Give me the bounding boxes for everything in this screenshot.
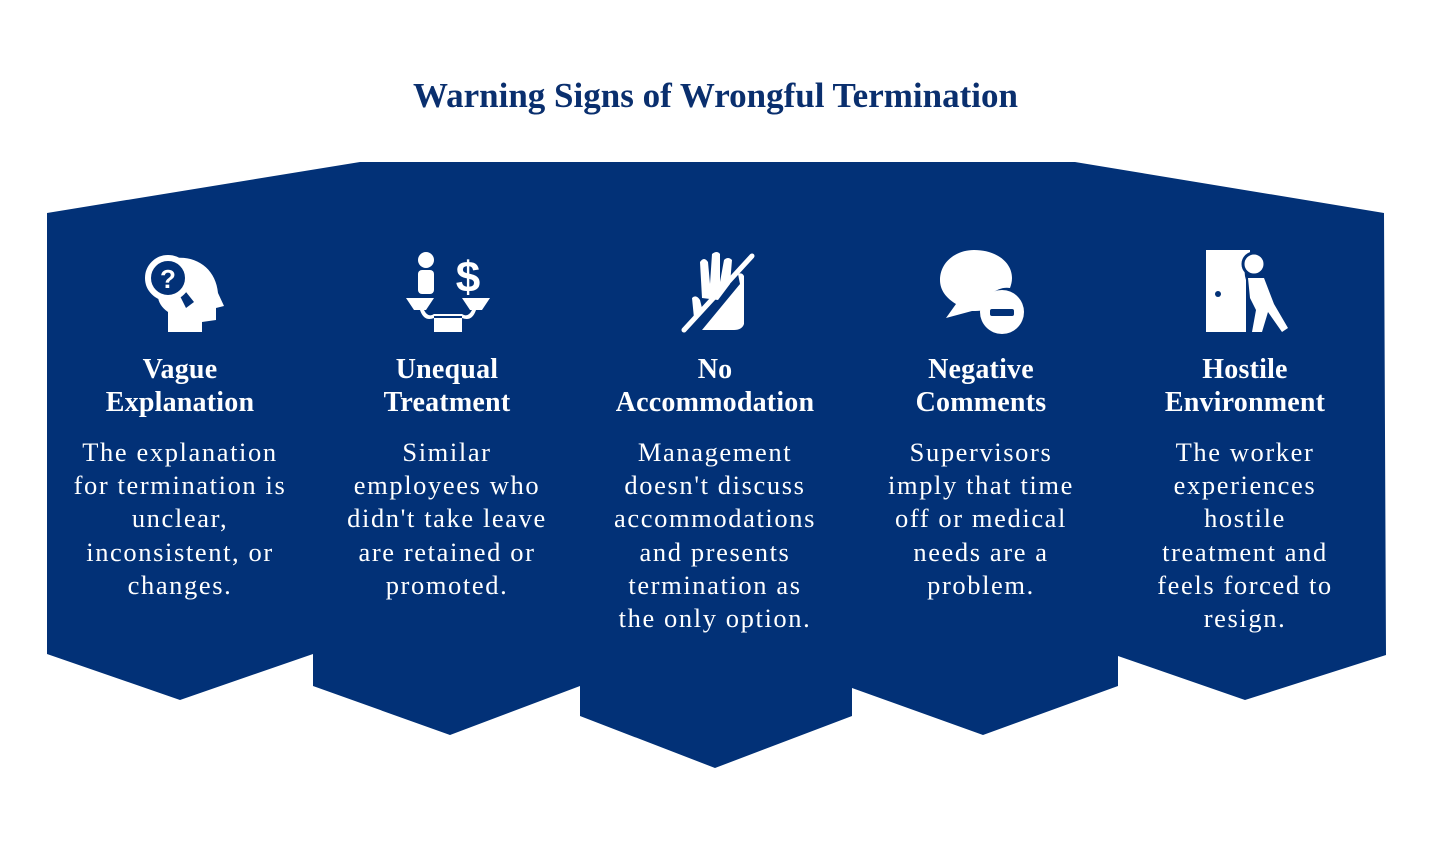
- icon: door person: [1206, 250, 1288, 332]
- title: Warning Signs of Wrongful Termination: [413, 76, 1018, 115]
- column 4: Supervisors: [910, 437, 1052, 467]
- icon: scale person dollar: $: [456, 253, 480, 302]
- column 1: inconsistent, or: [86, 537, 274, 567]
- column 5: resign.: [1204, 603, 1286, 633]
- column 5: Hostile: [1202, 354, 1288, 385]
- column 1: The explanation: [82, 437, 278, 467]
- column 2: promoted.: [386, 570, 508, 600]
- column 5: treatment and: [1162, 537, 1328, 567]
- column 4: Comments: [916, 387, 1046, 418]
- column 5: feels forced to: [1157, 570, 1333, 600]
- column 2: employees who: [354, 470, 540, 500]
- column 2: are retained or: [358, 537, 536, 567]
- icon: head with question magnifier: [145, 255, 224, 332]
- column 1: Vague: [143, 354, 217, 385]
- column 4: needs are a: [913, 537, 1049, 567]
- column 3: termination as: [628, 570, 802, 600]
- column 4: problem.: [927, 570, 1035, 600]
- column 4: off or medical: [895, 503, 1067, 533]
- column 2: Similar: [402, 437, 492, 467]
- column 2: [347, 354, 547, 600]
- column 5: experiences: [1174, 470, 1316, 500]
- column 1: for termination is: [74, 470, 286, 500]
- column 3: No: [698, 354, 732, 385]
- column 1: changes.: [128, 570, 232, 600]
- column 3: Accommodation: [616, 387, 814, 418]
- column 3: Management: [638, 437, 792, 467]
- icon: head with question magnifier: ?: [160, 264, 176, 294]
- column 5: The worker: [1176, 437, 1314, 467]
- column 3: [614, 354, 816, 633]
- column 3: the only option.: [619, 603, 811, 633]
- column 4: imply that time: [888, 470, 1074, 500]
- column 1: [74, 354, 286, 600]
- column 1: Explanation: [106, 387, 254, 418]
- column 3: accommodations: [614, 503, 816, 533]
- column 5: Environment: [1165, 387, 1325, 418]
- column 5: [1157, 354, 1333, 633]
- column 2: Unequal: [396, 354, 498, 385]
- column 4: Negative: [928, 354, 1034, 385]
- column 4: [888, 354, 1074, 600]
- column 1: unclear,: [132, 503, 228, 533]
- column 3: and presents: [640, 537, 790, 567]
- icon: scale person dollar: [406, 252, 490, 332]
- icon: hand crossed: [682, 252, 754, 332]
- column 2: didn't take leave: [347, 503, 547, 533]
- column 5: hostile: [1204, 503, 1286, 533]
- column 2: Treatment: [384, 387, 510, 418]
- icon: speech bubble minus: [940, 250, 1024, 334]
- column 3: doesn't discuss: [624, 470, 806, 500]
